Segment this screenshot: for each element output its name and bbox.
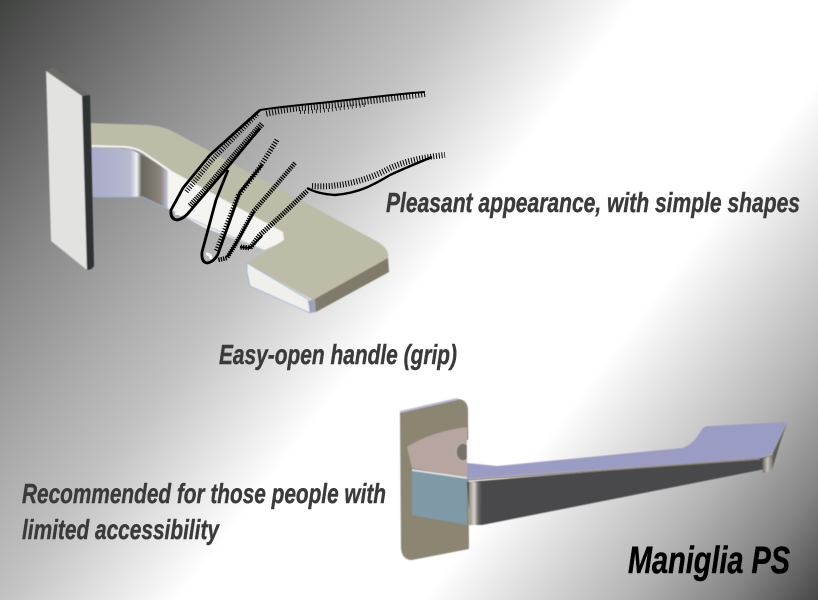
label: recommended: limited accessibility xyxy=(22,514,220,545)
hand top contour xyxy=(260,92,425,110)
handle end front face xyxy=(247,263,310,313)
hand lower contour xyxy=(307,157,432,195)
middle finger xyxy=(202,165,262,263)
illustration: wall plate xyxy=(46,67,94,270)
blue-grey box xyxy=(412,470,467,525)
plate top edge xyxy=(46,67,90,97)
pink collar xyxy=(407,427,467,478)
fingertip nails xyxy=(175,213,211,259)
label: easy-open handle: Easy-open handle (grip) xyxy=(219,339,457,370)
handle front white face xyxy=(168,167,285,250)
box white top edge xyxy=(412,470,467,478)
handle end dark side xyxy=(313,258,389,312)
handle tip metal xyxy=(762,455,773,473)
white gap over ring xyxy=(467,440,472,463)
handle top surface xyxy=(467,422,787,479)
handle end corner xyxy=(308,299,316,313)
illustration: hand sketch xyxy=(171,92,445,263)
illustration: upper door handle xyxy=(90,123,389,313)
plate dark side xyxy=(82,95,94,270)
handle top surface xyxy=(90,123,388,300)
handle lower blue edge xyxy=(93,197,263,250)
handle highlight edge xyxy=(91,146,170,171)
handle dark side xyxy=(467,455,773,525)
plate top highlight xyxy=(400,399,457,412)
rose ring xyxy=(456,443,470,461)
handle bright edge left xyxy=(469,482,482,525)
plate front face xyxy=(46,71,87,270)
illustration: lower door handle xyxy=(400,399,787,560)
label: recommended: Recommended for those people with xyxy=(22,478,386,509)
little finger xyxy=(240,191,307,248)
handle inner metallic wall xyxy=(91,147,172,210)
ring finger xyxy=(218,163,295,260)
index finger xyxy=(171,110,260,220)
handle edge line xyxy=(467,459,760,480)
handle tip shadow edge xyxy=(772,423,787,470)
plate xyxy=(400,399,469,560)
